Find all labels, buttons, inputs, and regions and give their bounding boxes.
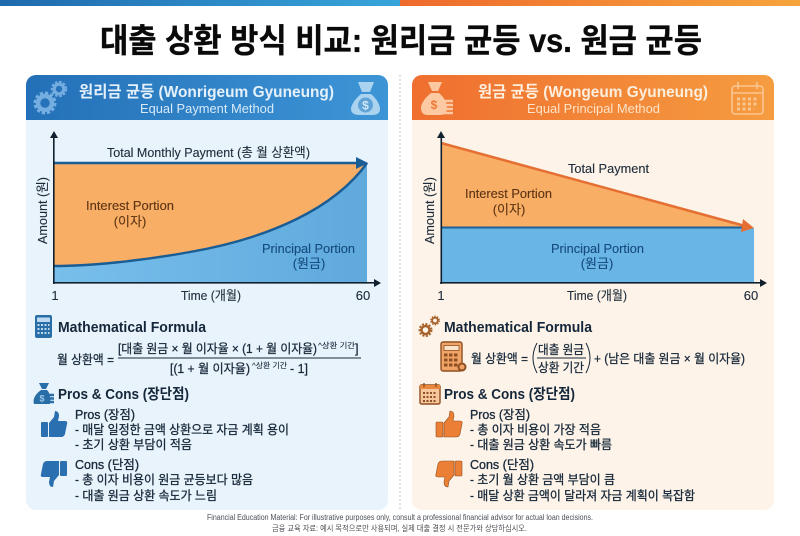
formula: ] (355, 342, 358, 356)
panel background (26, 75, 388, 510)
icon: calculator (35, 315, 52, 338)
label: interest portion (465, 186, 552, 217)
label: principal portion: (원금) (581, 256, 613, 271)
interest area (441, 143, 753, 228)
label: interest portion: Interest Portion (465, 186, 552, 201)
heading: pros and cons: Pros & Cons (장단점) (58, 386, 189, 403)
icon: calculator with gear (441, 342, 466, 371)
panel background (412, 75, 774, 510)
cons text (75, 458, 253, 503)
icon: money bag (351, 82, 380, 115)
axes (50, 131, 381, 287)
cons text: - 대출 원금 상환 속도가 느림 (75, 489, 217, 503)
heading: mathematical formula: Mathematical Formula (58, 320, 207, 336)
footer disclaimer (207, 513, 593, 533)
pros text: - 대출 원금 상환 속도가 빠름 (470, 438, 612, 452)
label: total payment: Total Payment (568, 161, 649, 176)
panel: Wonrigeum Gyuneung (equal payment) (26, 75, 388, 510)
pros text: - 초기 상환 부담이 적음 (75, 438, 192, 452)
top accent bar: blue (0, 0, 400, 6)
icon: thumbs down (436, 461, 462, 487)
subheading: Equal Principal Method (527, 101, 660, 116)
footer disclaimer: Financial Education Material: For illustrative purposes only, consult a professional financial advisor for actual loan decisions. (207, 513, 593, 522)
panel header (26, 75, 388, 120)
pros text: - 매달 일정한 금액 상환으로 자금 계획 용이 (75, 423, 289, 437)
formula: 대출 원금 (538, 343, 584, 357)
label: principal portion: Principal Portion (551, 241, 644, 256)
icon: thumbs down (41, 461, 67, 487)
formula: [(1 + 월 이자율) (170, 362, 250, 376)
label: principal portion: Principal Portion (262, 241, 355, 256)
axis label: time: Time (개월) (181, 288, 241, 303)
cons text: - 초기 월 상환 금액 부담이 큼 (470, 473, 615, 487)
total payment arrow (441, 143, 754, 232)
formula: ^상환 기간 (252, 360, 287, 370)
subheading: Equal Payment Method (140, 101, 274, 116)
icon: money bag and coins (421, 82, 453, 115)
footer disclaimer: 금융 교육 자료: 예시 목적으로만 사용되며, 실제 대출 결정 시 전문가와 상담하십시오. (272, 523, 527, 533)
tick: 1: 1 (437, 288, 445, 303)
cons text: - 총 이자 비용이 원금 균등보다 많음 (75, 473, 253, 487)
icon: thumbs up (436, 411, 462, 437)
axis label: amount: Amount (원) (422, 177, 437, 244)
pros text: Pros (장점) (75, 408, 135, 422)
tick: 60: 60 (356, 288, 370, 303)
principal area (54, 163, 367, 283)
formula: 월 상환액 = (57, 353, 114, 367)
axis label: time: Time (개월) (567, 288, 627, 303)
title: 대출 상환 방식 비교: 원리금 균등 vs. 원금 균등 (100, 22, 702, 59)
label: interest portion: (이자) (114, 214, 146, 229)
total payment arrow (54, 157, 368, 169)
cons text: - 매달 상환 금액이 달라져 자금 계획이 복잡함 (470, 489, 695, 503)
formula: + (남은 대출 원금 × 월 이자율) (594, 352, 745, 366)
label: interest portion (86, 198, 174, 229)
pros text: - 총 이자 비용이 가장 적음 (470, 423, 601, 437)
icon: money bag with coins: $ (39, 394, 45, 404)
formula (471, 343, 745, 375)
chart: equal principal area chart (422, 131, 767, 303)
chart: equal payment area chart (35, 131, 381, 303)
principal curve (54, 163, 367, 266)
formula: - 1] (290, 362, 308, 376)
pros text (75, 408, 289, 452)
label: interest portion: Interest Portion (86, 198, 174, 213)
interest area (54, 163, 367, 266)
label: interest portion: (이자) (493, 202, 525, 217)
icon: gears (35, 82, 66, 113)
top accent bar: orange (400, 0, 800, 6)
formula (57, 340, 361, 376)
label: principal portion: (원금) (293, 256, 325, 271)
tick: 1: 1 (51, 288, 59, 303)
axes (437, 131, 767, 287)
icon: money bag: $ (362, 98, 369, 112)
principal line (441, 226, 750, 228)
formula: [대출 원금 × 월 이자율 × (1 + 월 이자율) (118, 342, 317, 356)
pros text: Pros (장점) (470, 408, 530, 422)
panel header (412, 75, 774, 120)
panel: Wongeum Gyuneung (equal principal) (412, 75, 774, 510)
formula: 상환 기간 (538, 361, 584, 375)
pros text (470, 408, 612, 452)
heading: method name: 원리금 균등 (Wonrigeum Gyuneung) (79, 83, 334, 101)
tick: 60: 60 (744, 288, 758, 303)
label: principal portion (262, 241, 355, 271)
axis label: amount: Amount (원) (35, 177, 50, 244)
principal area (441, 228, 754, 283)
label: total monthly payment: Total Monthly Payment (총 월 상환액) (107, 145, 310, 160)
heading: method name: 원금 균등 (Wongeum Gyuneung) (478, 83, 708, 101)
formula: ^상환 기간 (318, 340, 355, 350)
icon: calendar (420, 383, 440, 404)
icon: thumbs up (41, 411, 67, 437)
cons text: Cons (단점) (75, 458, 139, 472)
formula: 월 상환액 = (471, 352, 528, 366)
icon: gears (420, 316, 439, 336)
icon: money bag and coins: $ (431, 98, 438, 112)
heading: pros and cons: Pros & Cons (장단점) (444, 386, 575, 403)
icon: calendar (732, 82, 763, 114)
icon: money bag with coins (34, 383, 54, 404)
cons text (470, 458, 695, 503)
cons text: Cons (단점) (470, 458, 534, 472)
heading: mathematical formula: Mathematical Formula (444, 320, 593, 336)
label: principal portion (551, 241, 644, 271)
